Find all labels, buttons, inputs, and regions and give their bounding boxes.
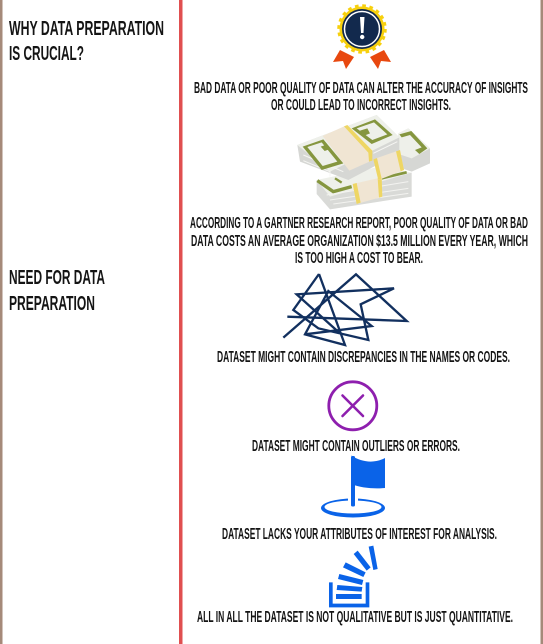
vertical divider (179, 0, 182, 644)
heading: need for data preparation: PREPARATION (9, 293, 95, 315)
text: bad data (194, 80, 528, 114)
text: gartner report: IS TOO HIGH A COST TO BEAR. (295, 250, 423, 267)
heading: why data preparation is crucial (9, 18, 164, 65)
icon: stacks of money (297, 115, 430, 209)
icon: stacked bars tray (329, 546, 378, 607)
bottom stack (317, 173, 412, 209)
top stack (297, 115, 399, 180)
icon: blue flag on target (321, 456, 385, 518)
icon: tangled lines (283, 274, 407, 345)
icon: purple cross circle (329, 382, 377, 430)
middle wrapper (373, 150, 404, 180)
heading: need for data preparation (9, 267, 105, 315)
icon: warning badge (333, 4, 391, 69)
heading: why data preparation is crucial: WHY DATA PREPARATION (9, 18, 164, 40)
heading: why data preparation is crucial: IS CRUCIAL? (9, 43, 84, 65)
text: gartner report (190, 215, 528, 267)
heading: need for data preparation: NEED FOR DATA (9, 267, 105, 289)
back right stack (397, 128, 430, 172)
